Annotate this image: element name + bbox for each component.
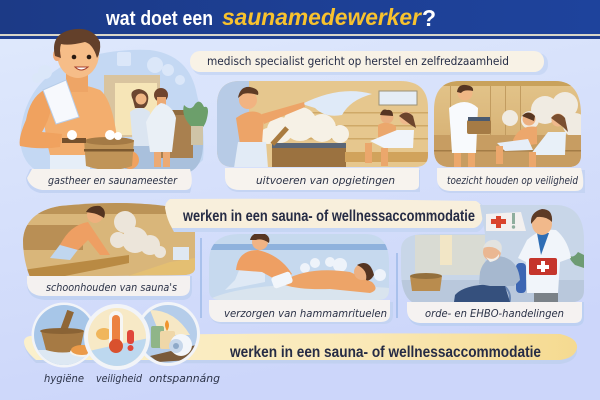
large host figure xyxy=(20,29,139,170)
label: hygiëne: hygiëne xyxy=(44,373,84,385)
ribbon: werken in een sauna xyxy=(165,199,486,232)
label: verzorgen van hammamrituelen: verzorgen van hammamrituelen xyxy=(224,308,387,320)
flying towel xyxy=(302,91,372,116)
bucket xyxy=(410,276,442,291)
label: verzorgen van hammamrituelen xyxy=(209,300,393,324)
floor xyxy=(401,280,584,303)
ribbon: werken in een sauna: werken in een sauna- of wellnessaccommodatie xyxy=(182,208,475,225)
doctor xyxy=(518,209,571,303)
title: ? xyxy=(422,5,436,31)
eyes xyxy=(72,55,76,59)
lying guest xyxy=(285,270,376,293)
scene backdrop xyxy=(20,50,204,172)
label: uitvoeren van opgietingen xyxy=(225,168,420,192)
label: uitvoeren van opgietingen: uitvoeren van opgietingen xyxy=(256,174,395,187)
man xyxy=(234,87,305,168)
attendant xyxy=(225,233,293,290)
towel wrap xyxy=(50,155,90,170)
label: schoonhouden van sauna's: schoonhouden van sauna's xyxy=(46,282,177,294)
arm xyxy=(20,90,62,148)
panel: schoonhouden van sauna's xyxy=(23,200,195,278)
wall slats xyxy=(300,112,428,140)
label: toezicht houden op veiligheid: toezicht houden op veiligheid xyxy=(447,175,578,187)
panel: verzorgen van hammamrituelen xyxy=(209,233,389,301)
label: gastheer en saunameester xyxy=(26,169,192,193)
label: veiligheid: veiligheid xyxy=(96,373,142,385)
plant xyxy=(183,102,208,132)
icon: first aid sign xyxy=(486,212,526,231)
steam clouds xyxy=(32,52,185,85)
ribbon: werken in een sauna, gold: werken in een sauna- of wellnessaccommodatie xyxy=(229,344,541,361)
label: orde- en EHBO-handelingen xyxy=(407,302,584,326)
plant xyxy=(570,252,584,268)
wall slats xyxy=(450,86,521,136)
attendant xyxy=(449,85,491,167)
panel: uitvoeren van opgietingen xyxy=(217,81,428,168)
steam xyxy=(110,211,166,258)
ribbon: medisch specialist: medisch specialist gericht op herstel en zelfredzaamheid xyxy=(207,54,509,68)
title: saunamedewerker xyxy=(222,4,422,30)
desk xyxy=(160,111,193,158)
panel: gastheer en saunameester xyxy=(20,29,208,172)
bucket xyxy=(84,140,134,170)
sign xyxy=(379,91,417,105)
ribbon: medisch specialist xyxy=(190,51,548,75)
seated pair xyxy=(345,110,428,166)
panel: toezicht houden op veiligheid xyxy=(434,81,587,168)
seated guests xyxy=(496,112,568,167)
floor xyxy=(125,140,203,172)
ribbon: werken in een sauna, gold xyxy=(24,333,577,364)
label: gastheer en saunameester: gastheer en saunameester xyxy=(48,175,178,187)
first aid kit xyxy=(529,258,557,275)
cleaner xyxy=(50,206,110,260)
icon: veiligheid xyxy=(84,304,150,370)
table xyxy=(212,286,389,300)
neck xyxy=(66,68,88,92)
title xyxy=(105,4,436,31)
bench xyxy=(23,255,129,277)
title: wat doet een xyxy=(105,8,213,30)
stove xyxy=(272,148,346,167)
face xyxy=(57,30,99,78)
steam xyxy=(260,107,349,144)
label: ontspanning: ontspannáng xyxy=(149,373,220,385)
doorway xyxy=(104,75,160,137)
label: toezicht houden op veiligheid xyxy=(437,168,585,193)
glow and steam xyxy=(502,92,581,135)
icon: hygiene xyxy=(32,302,91,368)
woman in coat xyxy=(130,89,150,146)
hand right xyxy=(121,151,139,169)
smile xyxy=(75,67,88,70)
torso xyxy=(44,84,119,155)
vertical divider left xyxy=(200,238,202,318)
label: schoonhouden van sauna's xyxy=(27,276,192,300)
bubbles xyxy=(300,257,386,281)
man in coat xyxy=(146,88,176,167)
label: orde- en EHBO-handelingen: orde- en EHBO-handelingen xyxy=(425,308,564,320)
panel: orde- en EHBO-handelingen xyxy=(401,205,584,302)
bench xyxy=(434,135,581,167)
supplies xyxy=(173,247,189,260)
hair xyxy=(54,29,100,58)
patient in wheelchair xyxy=(454,240,526,302)
header band xyxy=(0,0,600,39)
shoulder towel xyxy=(43,80,79,124)
icon: ontspanning xyxy=(136,302,200,366)
vertical divider right xyxy=(396,253,398,318)
